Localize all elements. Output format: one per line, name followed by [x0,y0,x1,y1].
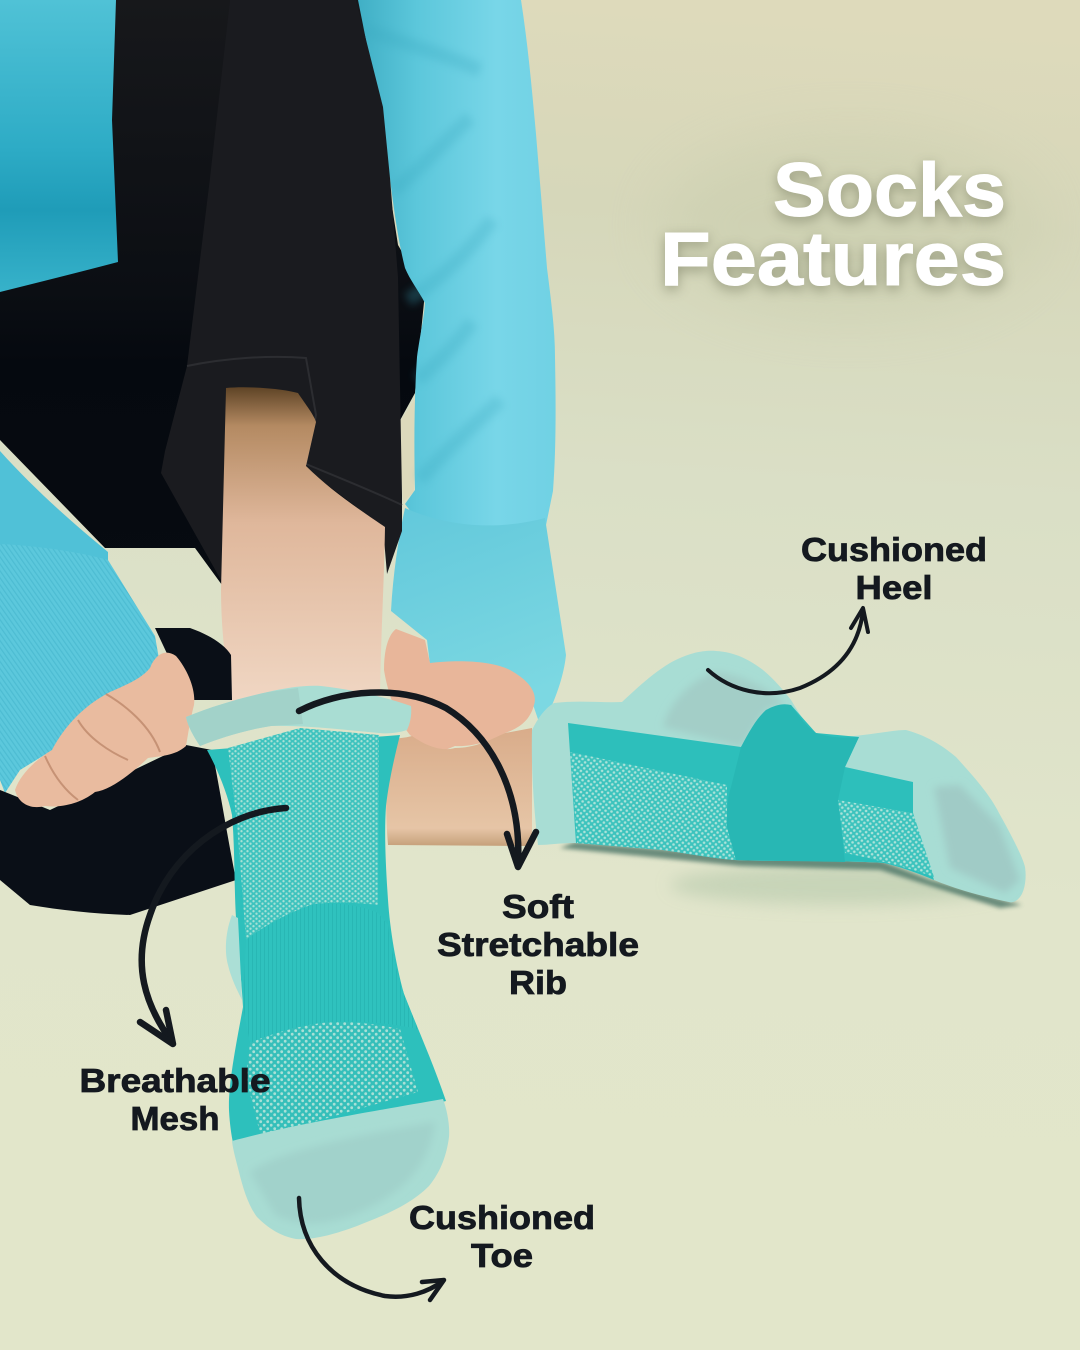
front sock body [207,735,446,1154]
dark trousers base [0,0,425,585]
right arm cuff [391,508,566,728]
raised trouser leg [161,0,402,582]
side sock body [532,651,1026,902]
title: Features [660,217,1006,302]
side sock mesh [570,752,736,860]
label: soft stretchable rib [437,888,639,1001]
front sock [186,686,449,1239]
back heel peek [226,915,242,1000]
side sock heel shading [663,672,785,747]
title: Socks [773,148,1006,233]
right hand [384,629,535,751]
arrow: heel [708,608,868,693]
right arm sleeve [358,0,556,530]
folded leg skin [386,728,532,846]
torso sweatshirt [0,0,118,292]
lower dark leg [0,628,236,915]
arrow: mesh [140,808,286,1044]
arrow: toe [299,1198,444,1300]
toe [232,1099,449,1239]
side sock band [727,704,859,862]
label: cushioned toe: Cushioned [409,1199,595,1236]
trouser hem [187,357,402,505]
sock shadow side [560,842,1022,908]
label: cushioned heel: Cushioned [801,531,987,568]
label: breathable mesh: Breathable [80,1062,270,1099]
arrow: rib [299,692,536,867]
floor soft shade [670,865,1010,905]
floor gap behind arm [398,398,416,502]
lower mesh [246,1022,418,1137]
left arm cuff [0,544,163,793]
left arm sleeve [0,451,108,566]
title [660,148,1006,302]
label: breathable mesh: Mesh [130,1100,220,1137]
upper mesh [228,728,379,940]
label: cushioned toe: Toe [471,1237,533,1274]
side sock forefoot mesh [838,800,934,877]
raised leg skin [221,387,385,710]
label: soft stretchable rib: Stretchable [437,926,639,963]
photo: seated person [0,0,566,915]
label: cushioned heel: Heel [856,569,932,606]
sleeve folds [365,30,500,480]
label: cushioned heel [801,531,987,606]
label: cushioned toe [409,1199,595,1274]
cuff [186,686,411,746]
label: breathable mesh [80,1062,270,1137]
label: soft stretchable rib: Soft [502,888,574,925]
side sock toe shading [934,785,1020,893]
ribbed mid band [243,903,418,1043]
side sock [532,651,1026,902]
left hand [15,653,194,807]
side sock teal panel [568,705,934,880]
label: soft stretchable rib: Rib [509,964,567,1001]
